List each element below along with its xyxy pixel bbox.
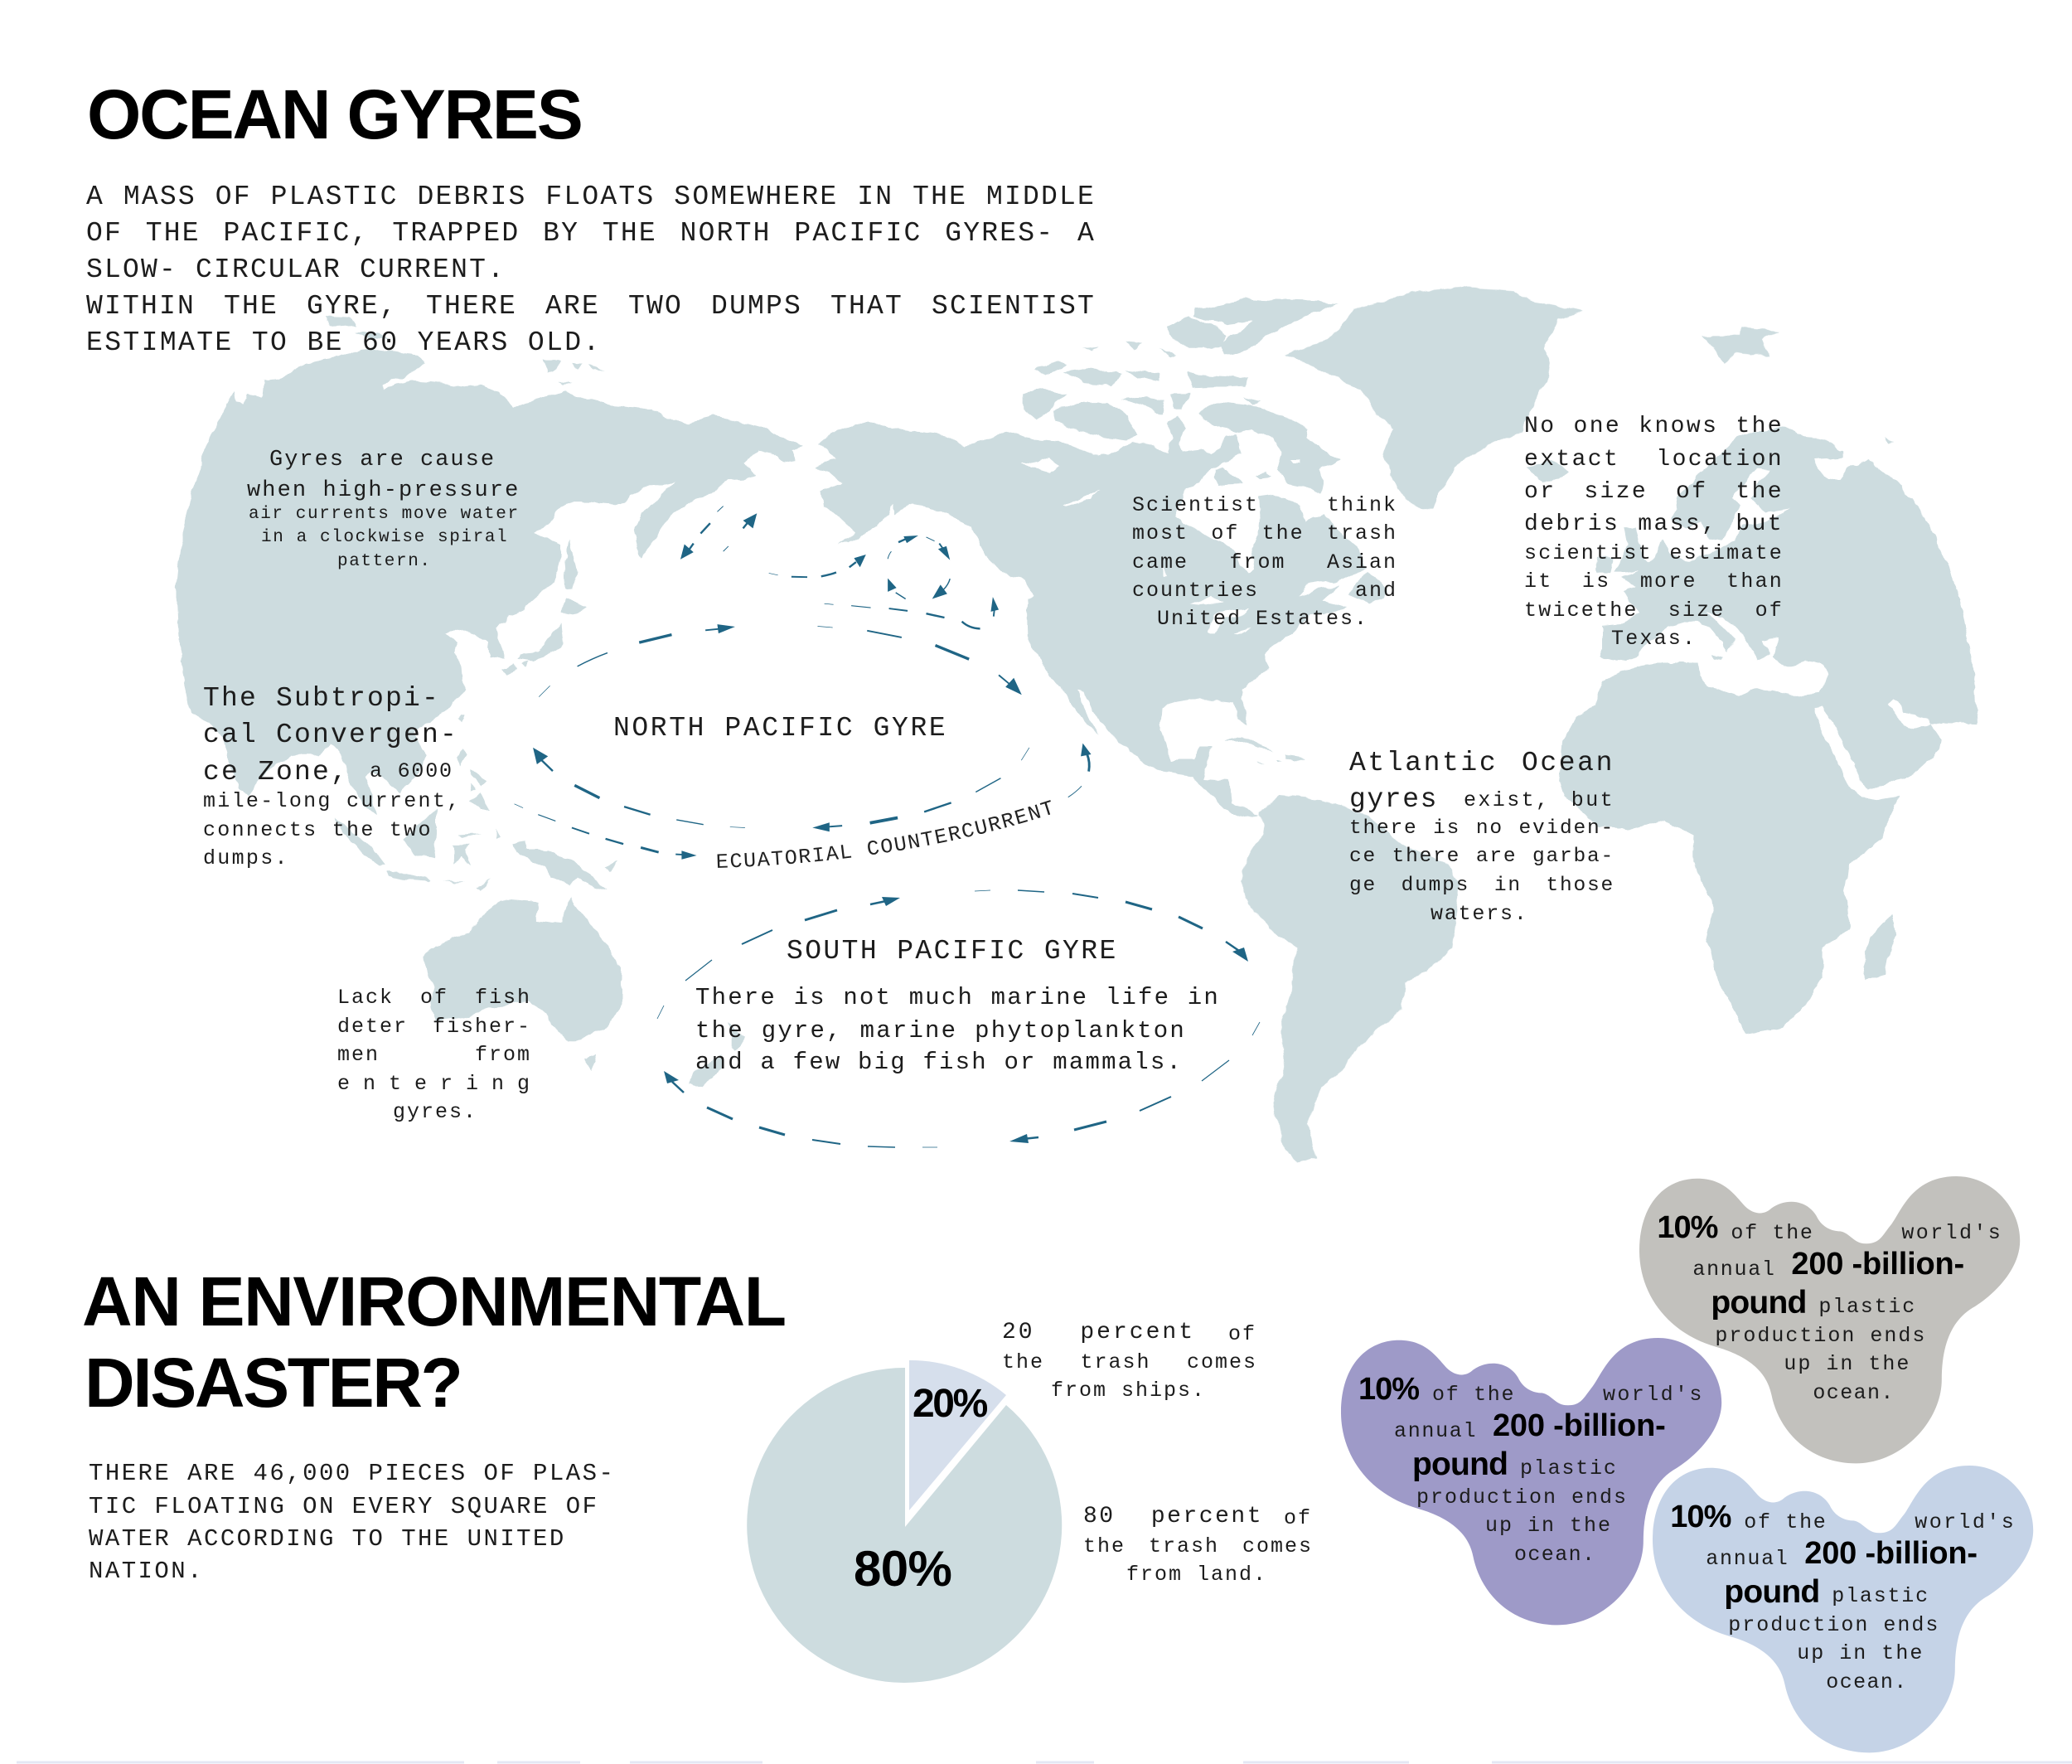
blob: grey statistic: world's [1901,1221,2002,1245]
text: subtropical convergence zone: ce Zone, [203,757,349,788]
text: lack of fish: entering [337,1072,543,1096]
blob: light blue statistic: pound [1724,1574,1819,1610]
blob: purple statistic: world's [1603,1383,1704,1407]
intro text: A MASS OF PLASTIC DEBRIS FLOATS SOMEWHERE IN THE MIDDLE [86,182,1096,212]
map: Europe, West Asia and Africa [1527,428,1978,1035]
text: atlantic ocean gyres: waters. [1431,902,1528,926]
pie value: 20%: 20% [913,1382,986,1426]
blob: grey statistic: production ends [1715,1324,1926,1348]
text: south pacific gyre: and a few big fish or mammals. [695,1049,1183,1076]
text: scientist think: United Estates. [1157,607,1368,631]
text: atlantic ocean gyres: ge dumps in those [1349,875,1615,897]
arrows: North Pacific currents [515,506,1091,860]
blob: light blue statistic: 200 -billion- [1804,1536,1978,1571]
text: 46,000 pieces: NATION. [89,1558,204,1585]
heading: an environmental disaster: AN ENVIRONMENTAL [82,1262,786,1340]
label: 80 percent [1083,1504,1313,1587]
blob: purple statistic: pound [1412,1447,1508,1482]
text: no one knows: twicethe size of [1524,598,1784,623]
blob: purple statistic: ocean. [1514,1543,1595,1567]
label: 80 percent: 80 percent [1083,1504,1263,1529]
label: 80 percent: from land. [1126,1563,1267,1587]
intro text: OF THE PACIFIC, TRAPPED BY THE NORTH PACIFIC GYRES- A [86,218,1096,249]
text: subtropical convergence zone: cal Convergen- [203,720,458,750]
blob: grey statistic: ocean. [1813,1381,1895,1405]
text: lack of fish: gyres. [393,1100,477,1124]
text: scientist think: came from Asian [1132,550,1397,574]
title: OCEAN GYRES [87,75,582,153]
blob: light blue statistic: production ends [1728,1613,1939,1637]
map: Greenland and Svalbard [1284,287,1779,510]
map: Madagascar [1861,914,1895,981]
label: equatorial countercurrent: ECUATORIAL COUNTERCURRENT [718,800,1051,900]
text: subtropical convergence zone: dumps. [203,846,289,870]
blob: purple statistic [1341,1338,1722,1625]
blob: grey statistic: 200 -billion- [1791,1247,1964,1282]
text: south pacific gyre: SOUTH PACIFIC GYRE [787,936,1118,967]
blob: purple statistic: 200 -billion- [1493,1408,1666,1443]
intro text: SLOW- CIRCULAR CURRENT. [86,254,506,285]
text: gyres cause: pattern. [337,552,432,571]
blob: light blue statistic: up in the [1797,1641,1924,1665]
text: atlantic ocean gyres: ce there are garba- [1349,846,1615,868]
arrows: South Pacific gyre [657,890,1260,1147]
text: no one knows: it is more than [1524,569,1784,594]
label: 20 percent: from ships. [1051,1379,1206,1403]
text: atlantic ocean gyres: exist, but [1464,788,1615,812]
blob: light blue statistic: plastic [1832,1584,1929,1608]
text: no one knows: No one knows the [1524,414,1784,439]
text: gyres cause [247,448,520,571]
map: land masses [177,287,1978,1162]
blob: light blue statistic: annual [1706,1547,1789,1571]
blob: purple statistic: 10% [1358,1372,1419,1407]
text: south pacific gyre [695,936,1220,1076]
text: no one knows: or size of the [1524,479,1784,505]
label: north pacific gyre: NORTH PACIFIC GYRE [613,713,947,744]
intro text: ESTIMATE TO BE 60 YEARS OLD. [86,327,602,358]
intro text: WITHIN THE GYRE, THERE ARE TWO DUMPS THAT SCIENTIST [86,291,1096,322]
text: no one knows [1524,414,1784,651]
blob: light blue statistic: 10% [1670,1500,1731,1534]
blob: light blue statistic: ocean. [1826,1670,1908,1694]
blob: grey statistic: of the [1731,1221,1814,1245]
text: 46,000 pieces: WATER ACCORDING TO THE UNITED [89,1525,566,1553]
label: 20 percent [1002,1320,1257,1403]
text: scientist think: most of the trash [1132,521,1397,545]
text: lack of fish [337,986,543,1124]
text: subtropical convergence zone: mile-long current, [203,789,461,813]
text: subtropical convergence zone: connects the two [203,818,433,842]
text: lack of fish: Lack of fish [337,986,531,1010]
text: 46,000 pieces: TIC FLOATING ON EVERY SQUARE OF [89,1493,598,1520]
text: no one knows: Texas. [1611,627,1697,651]
blob: grey statistic: 10% [1657,1210,1717,1245]
text: scientist think: countries and [1132,579,1397,603]
pie value: 80%: 80% [854,1541,951,1597]
blob: purple statistic: plastic [1520,1456,1618,1480]
text: atlantic ocean gyres: Atlantic Ocean [1349,748,1615,778]
blob: light blue statistic: of the [1744,1510,1828,1534]
blob: grey statistic: pound [1711,1285,1807,1321]
text: atlantic ocean gyres: there is no eviden- [1349,817,1615,840]
map: Australia and New Zealand [423,898,745,1088]
heading: an environmental disaster: DISASTER? [85,1344,461,1422]
label: 80 percent: of [1284,1506,1312,1530]
blob: grey statistic: plastic [1818,1295,1916,1319]
text: lack of fish: men from [337,1043,531,1067]
label: 20 percent: the trash comes [1002,1350,1257,1374]
blob: light blue statistic [1653,1466,2034,1752]
text: subtropical convergence zone: a 6000 [370,759,453,783]
heading: an environmental disaster [82,1262,786,1422]
blob: purple statistic: annual [1394,1419,1477,1443]
text: no one knows: debris mass, but [1524,511,1784,537]
text: atlantic ocean gyres: gyres [1349,784,1438,815]
text: 46,000 pieces [89,1460,615,1585]
intro text [86,182,1096,358]
text: scientist think: Scientist think [1132,493,1397,517]
text: no one knows: extact location [1524,447,1784,472]
text: no one knows: scientist estimate [1524,541,1784,565]
text: gyres cause: Gyres are cause [269,448,496,472]
map: North America [813,402,1387,817]
bottom edge line [17,1761,2072,1764]
map: South America [1241,796,1459,1162]
pie chart [747,1360,1062,1683]
text: gyres cause: air currents move water [249,505,520,524]
blob: purple statistic: production ends [1416,1485,1628,1510]
blob: grey statistic [1639,1176,2021,1464]
blob: purple statistic: up in the [1485,1514,1612,1538]
text: atlantic ocean gyres [1349,748,1615,926]
text: subtropical convergence zone [203,683,461,870]
text: scientist think [1132,493,1397,631]
text: lack of fish: deter fisher- [337,1015,531,1039]
blob: grey statistic: annual [1692,1258,1776,1282]
text: gyres cause: in a clockwise spiral [261,528,508,547]
map: Canadian Arctic islands [1022,299,1339,441]
text: gyres cause: when high-pressure [247,478,520,503]
blob: light blue statistic: world's [1915,1510,2016,1534]
label: 80 percent: the trash comes [1083,1534,1313,1558]
text: south pacific gyre: There is not much marine life in [695,984,1220,1011]
map: Asia [177,316,802,890]
text: subtropical convergence zone: The Subtropi- [203,683,440,714]
label: 20 percent: 20 percent [1002,1320,1195,1345]
label: 20 percent: of [1228,1322,1256,1346]
text: south pacific gyre: the gyre, marine phytoplankton [695,1017,1186,1044]
blob: purple statistic: of the [1432,1383,1515,1407]
text: 46,000 pieces: THERE ARE 46,000 PIECES OF PLAS- [89,1460,615,1487]
blob: grey statistic: up in the [1784,1352,1910,1376]
